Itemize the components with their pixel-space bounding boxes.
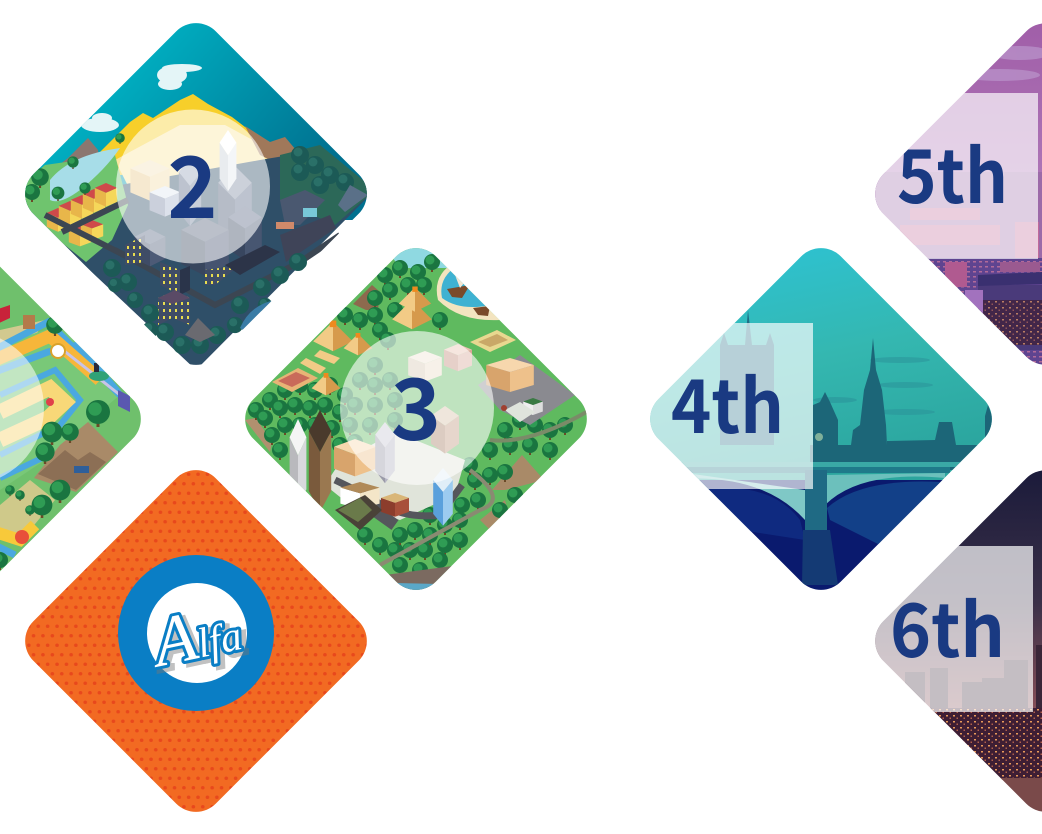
number badge circle (116, 110, 270, 264)
distant city (870, 172, 1042, 262)
white disc (147, 583, 247, 683)
teal sky (645, 240, 995, 500)
row houses (47, 183, 117, 246)
bridge deck (650, 462, 980, 473)
panel: diamond 1 board game map (partly cropped) (0, 266, 141, 572)
forest (248, 254, 573, 580)
buildings (945, 262, 1042, 350)
bottom edge cliff and water (389, 566, 452, 590)
night buildings with lit windows (125, 190, 336, 325)
parliament silhouette (810, 338, 992, 470)
downtown buildings (130, 130, 262, 276)
logo shadow: Alfa (147, 592, 252, 686)
ancient pyramids (272, 286, 516, 395)
near city (870, 258, 1042, 368)
panel: 5th place, city (870, 20, 1042, 368)
board path tiles (0, 322, 120, 555)
panel: 6th place, night city (870, 465, 1042, 818)
cloud streaks (960, 46, 1042, 81)
lagoon (50, 148, 120, 201)
green ground (240, 240, 590, 600)
lower river (645, 480, 995, 600)
clouds (81, 64, 202, 132)
label 5th: 5th (897, 118, 1008, 225)
mountain (34, 422, 118, 492)
logo wordmark: Alfa (142, 589, 247, 683)
roads (45, 200, 340, 305)
number 3: 3 (391, 342, 441, 465)
game board ground (0, 266, 141, 572)
colonial buildings (290, 344, 543, 526)
white label panel (870, 546, 1033, 712)
label 4th: 4th (671, 348, 784, 455)
mountains (245, 285, 544, 530)
bay with ships (436, 268, 500, 320)
bridge arches (665, 433, 945, 585)
logo badge (118, 555, 274, 711)
sky tip (394, 248, 448, 268)
river and rocks (185, 185, 368, 342)
dusk sky (870, 465, 1042, 715)
blue ring (118, 555, 274, 711)
number badge circle (340, 331, 494, 485)
sky (20, 20, 370, 220)
number badge circle (0, 331, 44, 485)
panel: diamond 3 historic map (240, 240, 590, 600)
right dark grass (280, 145, 375, 225)
icon: board markers (0, 305, 130, 544)
panel: 4th place, Westminster (640, 240, 995, 600)
yellow mountains (100, 94, 262, 175)
lit lower city (870, 708, 1042, 780)
white label panel (870, 93, 1038, 259)
sky streaks (813, 357, 935, 415)
distant blocks (900, 208, 1039, 262)
panel: diamond with Alfa logo (20, 465, 370, 815)
label 6th: 6th (890, 572, 1005, 679)
dotted orange background (20, 465, 370, 815)
lower dark plaza (335, 402, 535, 530)
white label panel (640, 323, 813, 489)
land base (15, 155, 375, 370)
panel: diamond 2 city map (15, 20, 375, 370)
big tower left (720, 310, 774, 445)
skyline (905, 645, 1042, 715)
tropical trees (24, 133, 125, 202)
hills (62, 126, 294, 163)
left green shore (15, 155, 128, 262)
plaza and roads (325, 355, 590, 565)
purple sky (870, 20, 1042, 210)
dark tree belt (103, 146, 354, 354)
trees (0, 316, 110, 570)
sand plain (116, 125, 268, 184)
harbour glow (930, 778, 1042, 818)
number 2: 2 (167, 120, 218, 243)
